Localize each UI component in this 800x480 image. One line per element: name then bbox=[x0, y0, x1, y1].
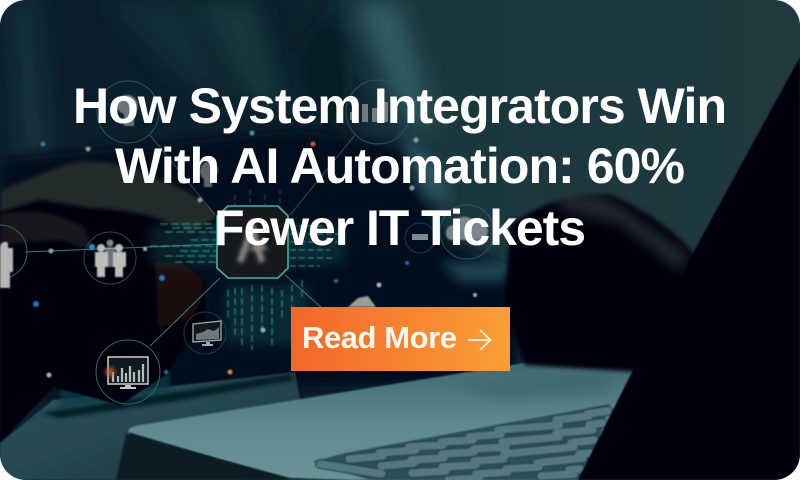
left hand bbox=[0, 160, 225, 443]
icon: people group bbox=[84, 232, 136, 284]
title: How System Integrators Win bbox=[73, 78, 727, 134]
icon: small bulb bbox=[200, 162, 218, 187]
icon: large monitor bbox=[96, 340, 160, 404]
dark mid zone behind network bbox=[0, 130, 520, 395]
icon: cloud circles bbox=[405, 205, 494, 259]
icon: person bbox=[0, 225, 27, 288]
icon: arrow bbox=[468, 330, 490, 350]
title: With AI Automation: 60% bbox=[115, 138, 685, 194]
table bbox=[0, 372, 300, 480]
icon: light bulb bbox=[97, 81, 159, 143]
right hand bbox=[505, 191, 700, 372]
title bbox=[76, 86, 724, 246]
shirt folds bbox=[10, 0, 430, 170]
central chip bbox=[217, 206, 288, 278]
glow at sleeve bbox=[402, 135, 450, 200]
title: Fewer IT Tickets bbox=[214, 200, 586, 256]
laptop screen edge bbox=[578, 57, 800, 480]
button label: Read More bbox=[302, 320, 457, 355]
connector lines bbox=[25, 135, 355, 346]
circuit glow bbox=[150, 225, 345, 345]
icon: partially hidden cloud above button bbox=[348, 296, 376, 307]
keyboard keys bbox=[320, 411, 608, 480]
icon: bar graph bbox=[346, 80, 410, 144]
read more button bbox=[291, 307, 510, 371]
icon: small monitor bbox=[184, 312, 226, 354]
keyboard underlay bbox=[313, 404, 610, 480]
AI network graphic bbox=[0, 80, 494, 404]
laptop base and keyboard bbox=[116, 362, 640, 480]
circuit traces bbox=[150, 190, 345, 350]
glowing nodes bbox=[33, 130, 477, 378]
